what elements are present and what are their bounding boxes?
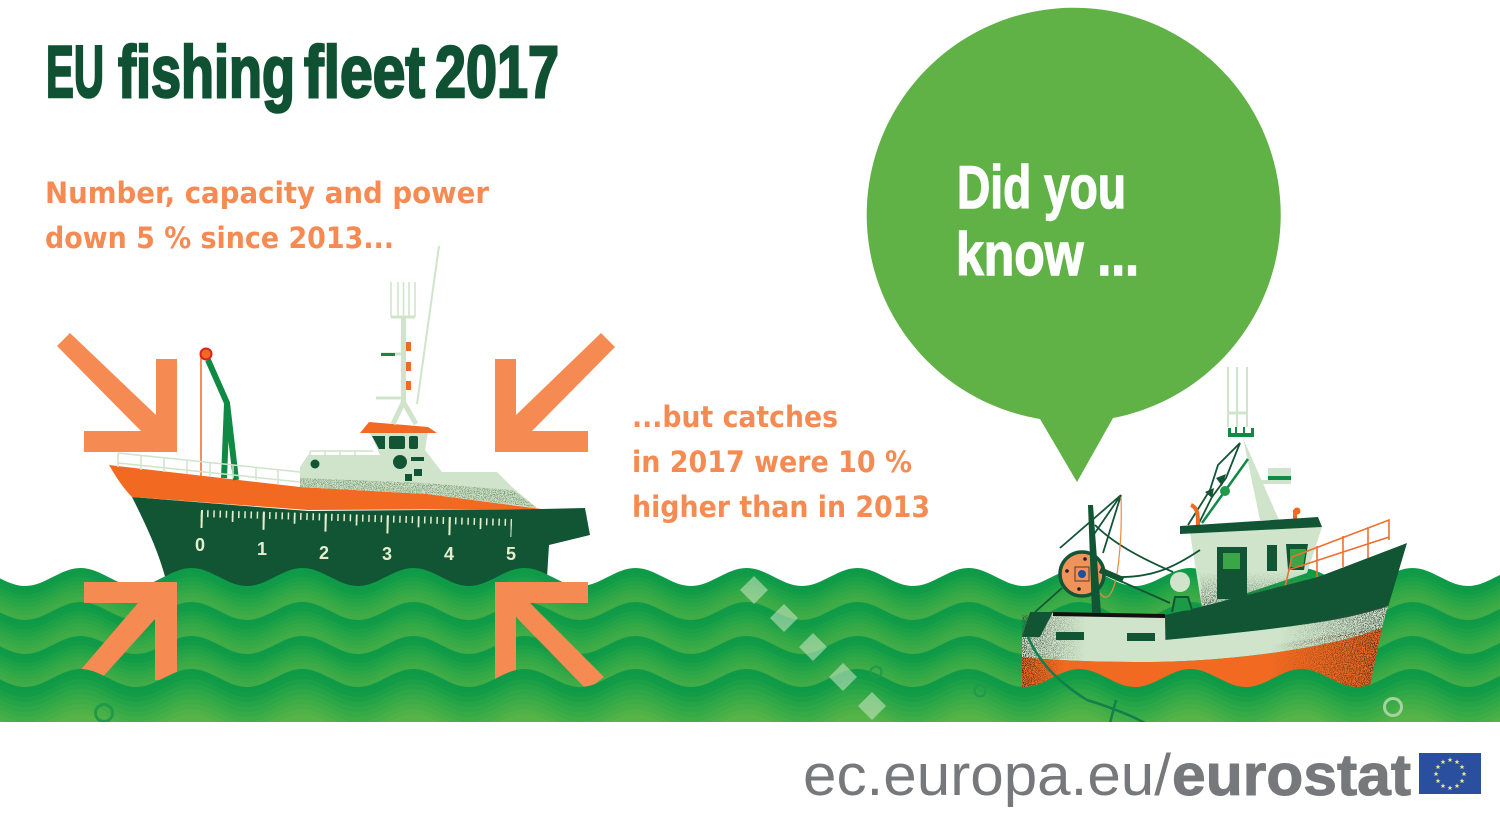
title: fishing xyxy=(118,32,295,113)
orange hull speckle left xyxy=(1022,657,1065,700)
anchor line xyxy=(1028,637,1145,723)
winch reel xyxy=(1060,552,1104,596)
ruler numbers: 3 xyxy=(382,544,392,564)
ruler numbers: 4 xyxy=(444,544,454,564)
ruler numbers: 2 xyxy=(319,543,329,563)
hull speckle right xyxy=(1280,606,1388,650)
orange railing xyxy=(1285,520,1389,587)
title xyxy=(46,32,559,113)
wheelhouse windows xyxy=(310,436,424,481)
bubble shape xyxy=(867,8,1281,482)
wave band 3 xyxy=(0,636,1500,725)
deck railing xyxy=(118,451,373,484)
wave band 2 xyxy=(0,602,1500,691)
dome xyxy=(1170,572,1192,612)
wheelhouse roof xyxy=(360,422,437,433)
title: EU xyxy=(46,32,104,113)
speech bubble xyxy=(867,8,1281,482)
thin orange line xyxy=(1100,497,1121,597)
bubble text: know ... xyxy=(956,221,1139,288)
arrow top right xyxy=(495,333,615,452)
mast lights xyxy=(381,342,411,390)
door and windows xyxy=(1217,544,1308,599)
white footer background xyxy=(0,722,1500,830)
rigging xyxy=(1188,443,1300,525)
eurostat footer url xyxy=(803,743,1411,808)
text: but catches xyxy=(632,400,930,524)
mast crown xyxy=(1228,427,1254,437)
title: 2017 xyxy=(435,32,559,113)
crane xyxy=(200,348,236,480)
left ship: hull behind the waves xyxy=(109,246,590,610)
arrow bottom right xyxy=(495,582,604,690)
hull speckle xyxy=(1022,615,1085,660)
title: fleet xyxy=(304,32,425,113)
mast with trident and antenna xyxy=(376,246,439,424)
winch pole xyxy=(1088,505,1101,613)
orange deck band xyxy=(109,465,541,510)
cabin speckle xyxy=(1200,572,1310,610)
flag stars xyxy=(1434,757,1466,790)
winch arm xyxy=(1100,570,1123,580)
ruler numbers: 5 xyxy=(506,544,516,564)
text: number, capacity and power: down 5 % since 2013... xyxy=(45,221,394,255)
arrows pointing inward xyxy=(57,333,615,690)
waves: upper three bands xyxy=(0,568,1500,725)
diamonds trail xyxy=(740,576,886,720)
hull details xyxy=(1022,612,1155,641)
bubble text xyxy=(956,154,1139,288)
cabin xyxy=(1190,527,1322,608)
right ship: fishing trawler xyxy=(1022,367,1407,700)
superstructure xyxy=(300,432,537,508)
upper dark hull xyxy=(1165,543,1407,640)
orange hull speckle right xyxy=(1270,628,1382,700)
orange lower hull xyxy=(1022,628,1382,700)
text: but catches: higher than in 2013 xyxy=(632,490,930,524)
white hull band xyxy=(1022,606,1388,662)
black deck line xyxy=(1053,614,1165,616)
eurostat footer url: ec.europa.eu/ xyxy=(803,743,1172,808)
cabin roof xyxy=(1180,517,1322,534)
eurostat footer url: eurostat xyxy=(1172,743,1411,808)
bubbles xyxy=(96,666,1402,722)
ruler numbers: 1 xyxy=(257,539,267,559)
mast and trident xyxy=(1228,367,1279,520)
cables xyxy=(1035,495,1200,612)
text: number, capacity and power xyxy=(45,176,489,255)
bubble text: Did you xyxy=(957,154,1126,221)
arrow top left xyxy=(57,333,177,452)
speckle on superstructure xyxy=(300,478,537,508)
flag xyxy=(1268,468,1291,484)
wave band 1 xyxy=(0,568,1500,657)
ruler numbers xyxy=(195,535,516,564)
ruler ticks xyxy=(201,513,512,528)
dark green hull xyxy=(132,497,590,610)
text: number, capacity and power: Number, capacity and power xyxy=(45,176,489,210)
EU flag xyxy=(1419,753,1481,794)
text: but catches: in 2017 were 10 % xyxy=(632,445,912,479)
ruler numbers: 0 xyxy=(195,535,205,555)
text: but catches: ...but catches xyxy=(632,400,838,434)
arrow bottom left xyxy=(72,582,177,680)
waves: front band xyxy=(0,669,1500,774)
